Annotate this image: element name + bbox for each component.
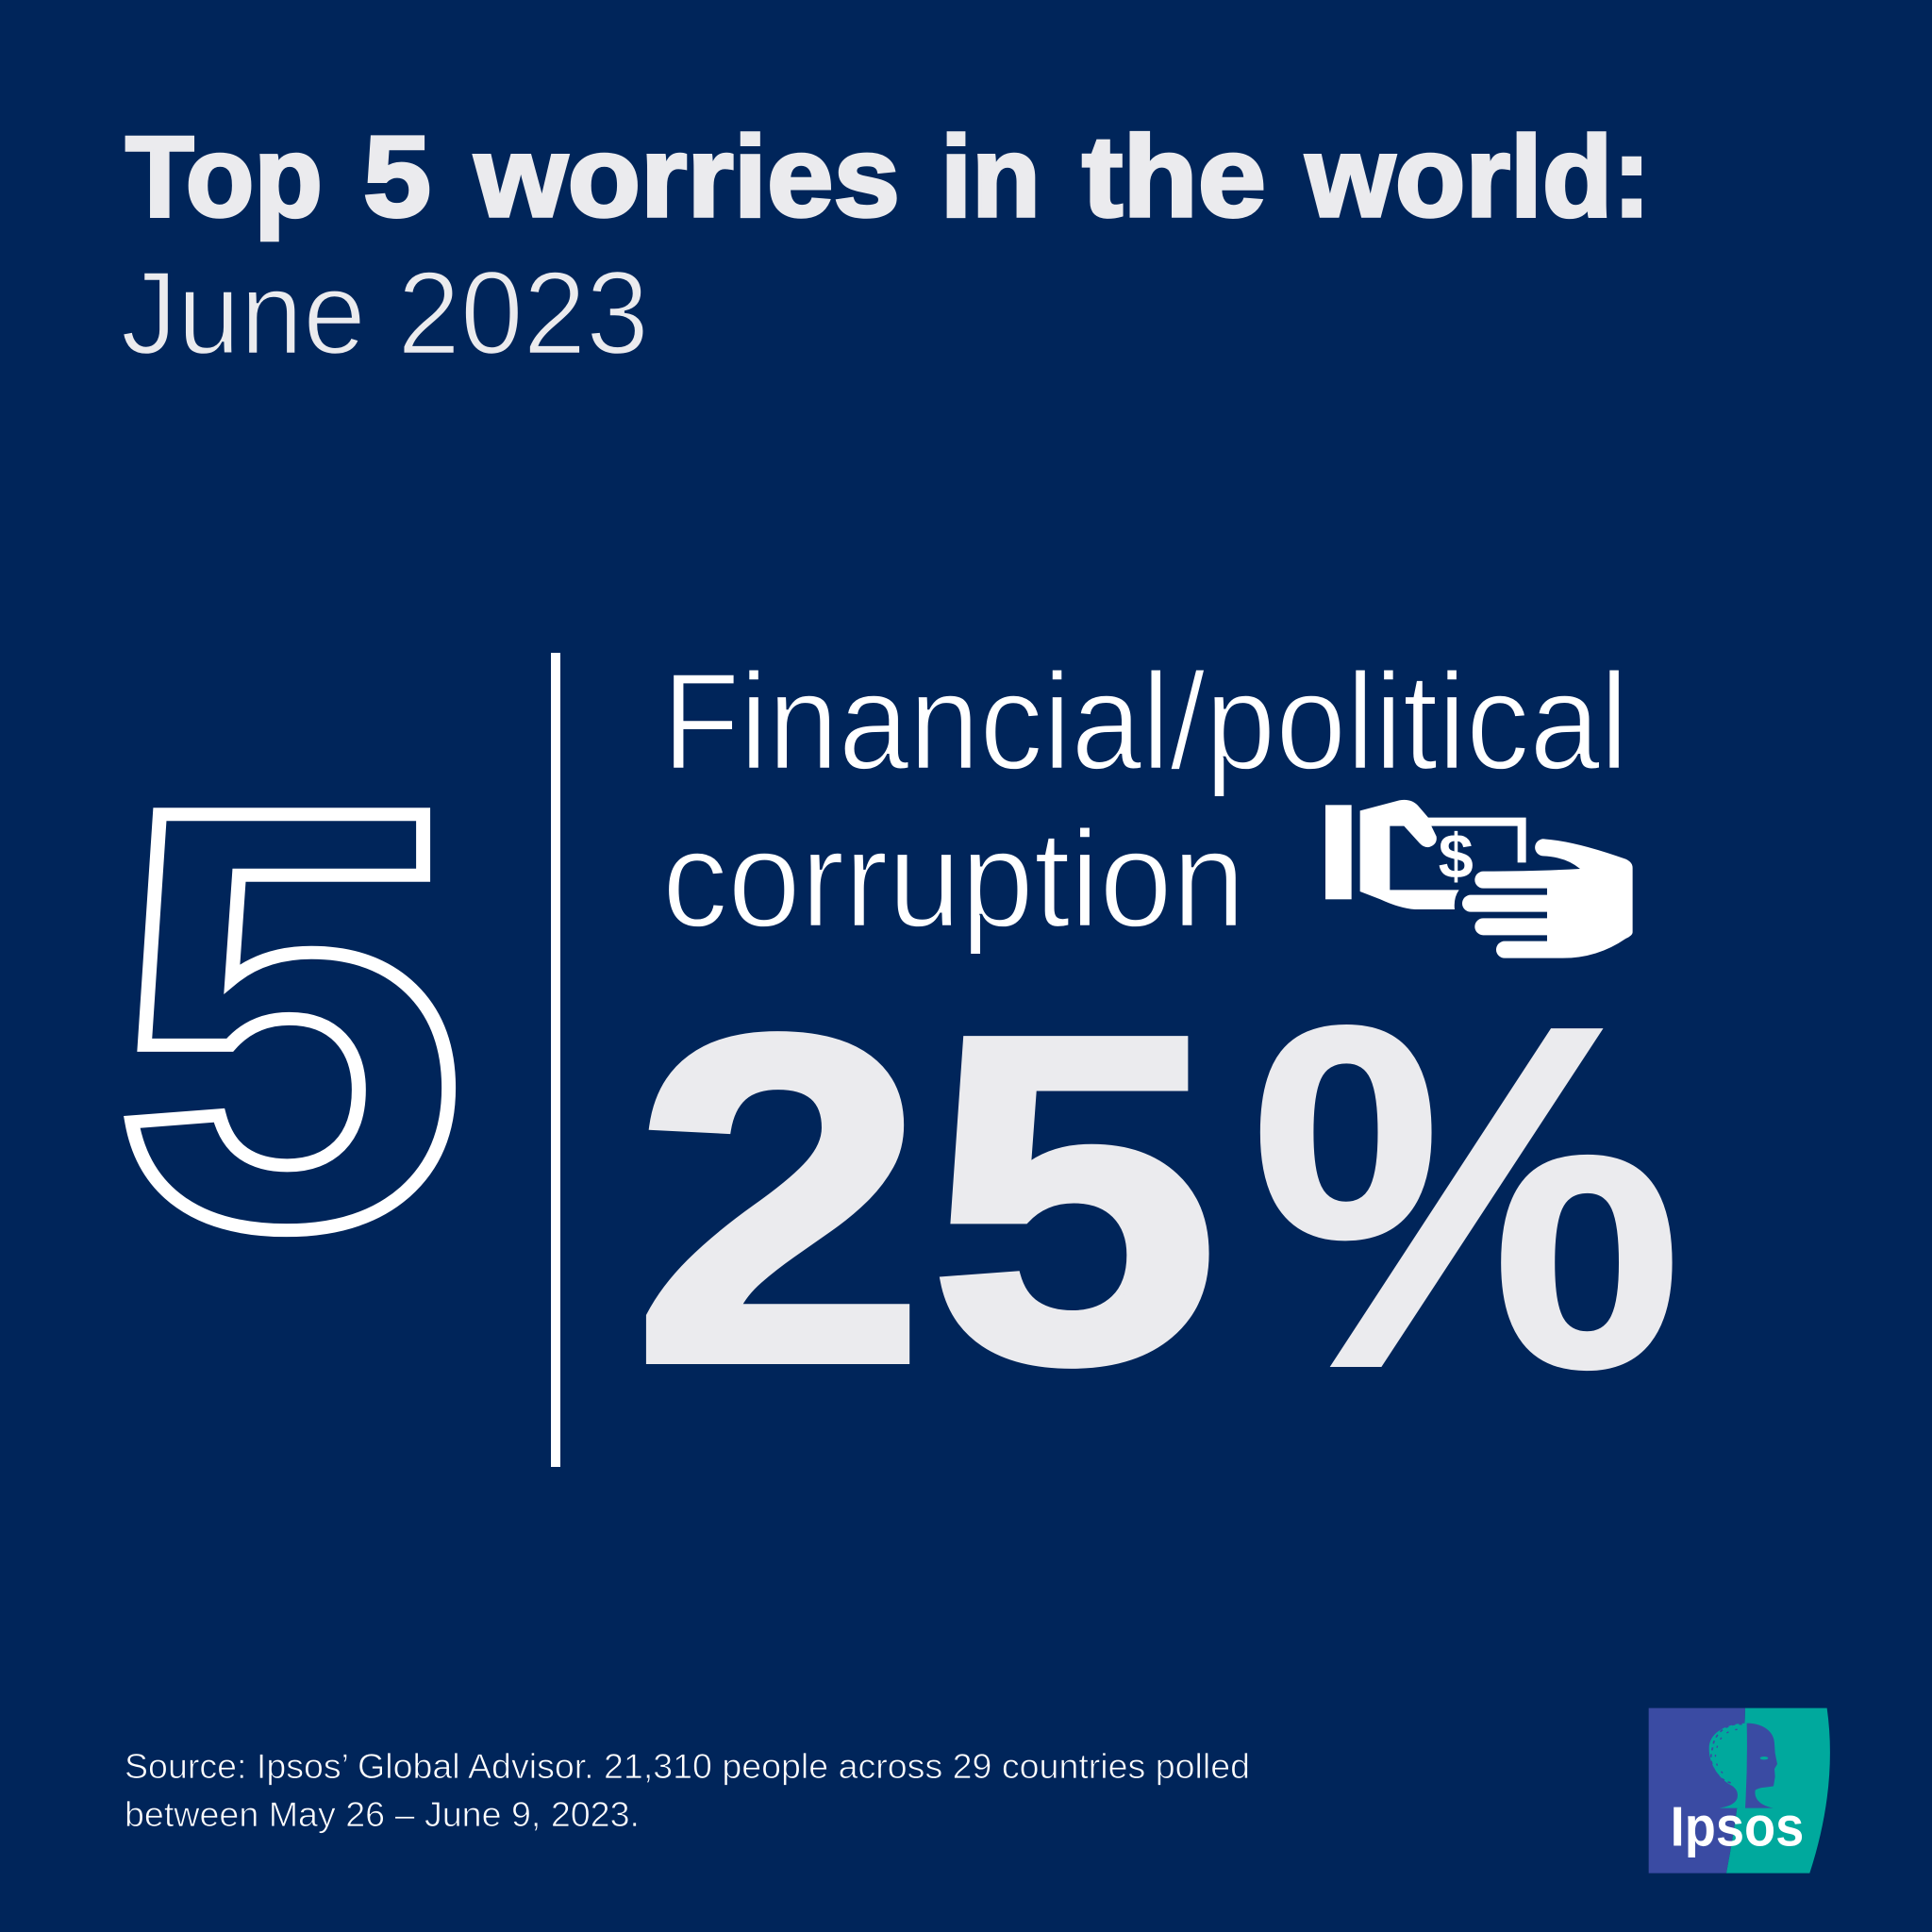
heading: Top 5 worries: [125, 112, 1651, 241]
percentage value: [632, 923, 1684, 1470]
logo: blue panel: [1649, 1708, 1745, 1874]
icon: left hand with banknote: [1360, 800, 1526, 909]
logo: tree and head: [1709, 1724, 1777, 1808]
heading: Top 5 worries: 5: [363, 112, 431, 241]
heading: Top 5 worries: in: [941, 112, 1041, 241]
percent sign: %: [1249, 923, 1684, 1470]
source line 1: Source: Ipsos’ Global Advisor. 21,310 people across 29 countries polled: [125, 1747, 1250, 1786]
icon: sleeve: [1325, 805, 1352, 899]
digit 5: 5: [928, 939, 1220, 1459]
heading: Top 5 worries: worries: [474, 112, 900, 241]
icon: dollar sign: $: [1439, 823, 1474, 892]
heading: Top 5 worries: Top: [125, 112, 323, 241]
logo: Ipsos: [1649, 1708, 1830, 1874]
icon: hands exchanging money: [1325, 800, 1633, 958]
heading: Top 5 worries: the: [1082, 112, 1266, 241]
heading: Top 5 worries: world:: [1305, 112, 1651, 241]
subheading: June 2023: June 2023: [121, 248, 649, 379]
title: [121, 112, 1651, 379]
label line 2: corruption: [662, 802, 1245, 956]
vertical divider: [551, 653, 560, 1467]
logo: wordmark: Ipsos: [1671, 1795, 1804, 1858]
digit 2: 2: [632, 939, 926, 1460]
icon: right hand: [1462, 839, 1633, 958]
label line 1: Financial/political: [662, 644, 1628, 798]
rank number outline: 5: [112, 685, 466, 1351]
source note: [125, 1747, 1250, 1834]
source line 2: between May 26 – June 9, 2023.: [125, 1795, 640, 1834]
logo: teal panel: [1726, 1708, 1830, 1874]
worry label: [662, 644, 1628, 956]
